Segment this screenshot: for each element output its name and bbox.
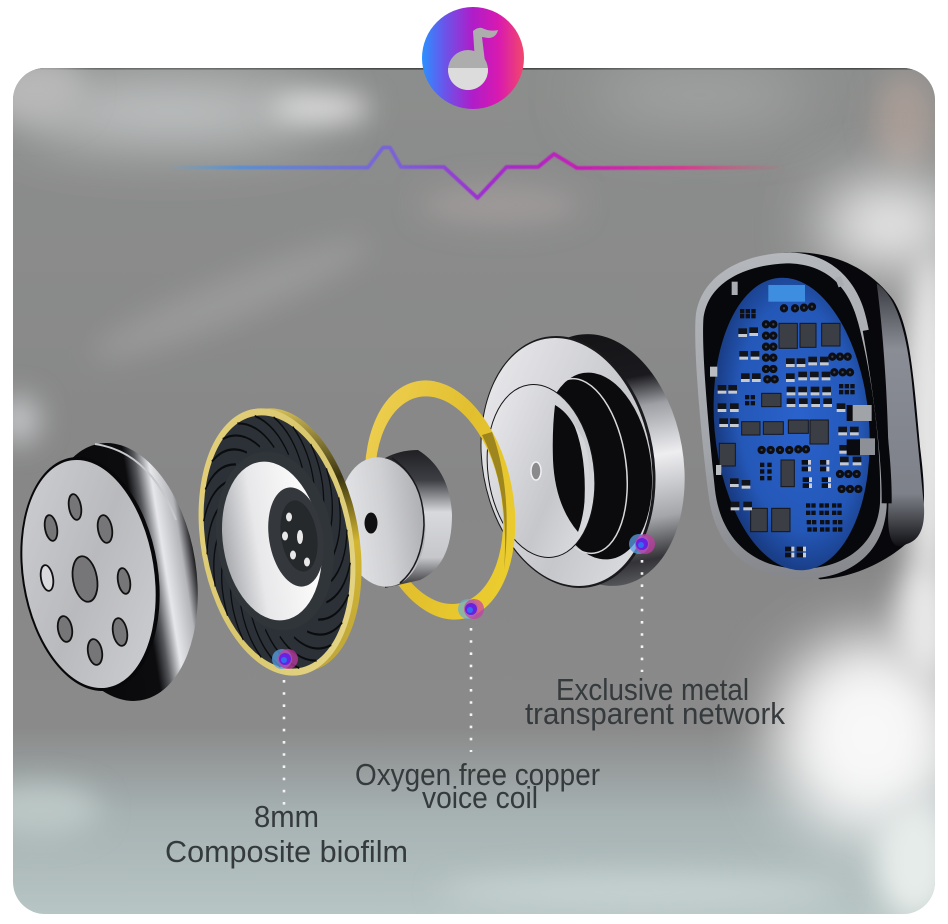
hotspot and leader: diaphragm xyxy=(272,649,298,808)
hotspot and leader: voice coil xyxy=(458,599,484,752)
speaker centre holes xyxy=(282,512,310,566)
label: copper voice coil: voice coil xyxy=(422,780,538,815)
small components xyxy=(738,328,747,337)
label: copper voice coil: Oxygen free copper xyxy=(355,757,600,792)
chips xyxy=(719,323,840,532)
label: composite biofilm: 8mm xyxy=(254,799,319,834)
icon: music note badge xyxy=(422,7,524,109)
component: large chrome ring xyxy=(461,321,704,602)
component: perforated back plate xyxy=(4,432,215,712)
label: composite biofilm: Composite biofilm xyxy=(165,834,408,869)
label: copper voice coil xyxy=(355,757,600,815)
plate holes xyxy=(39,493,132,666)
label: metal transparent network: Exclusive metal xyxy=(556,672,749,707)
component: speaker diaphragm with gold rim xyxy=(179,395,381,689)
label: metal transparent network xyxy=(525,672,785,731)
component: circuit board housing xyxy=(695,252,924,579)
label: composite biofilm xyxy=(165,799,408,869)
label: metal transparent network: transparent network xyxy=(525,696,785,731)
component: magnet cylinder xyxy=(331,450,452,592)
resistor grids xyxy=(806,503,810,508)
metal connectors xyxy=(852,405,872,421)
surround ribs xyxy=(179,395,375,689)
sound wave line xyxy=(170,148,784,198)
circuit board xyxy=(702,271,881,577)
component: gold voice coil ring xyxy=(345,367,535,633)
round component rows xyxy=(759,304,861,492)
hotspot and leader: metal network xyxy=(629,534,655,672)
